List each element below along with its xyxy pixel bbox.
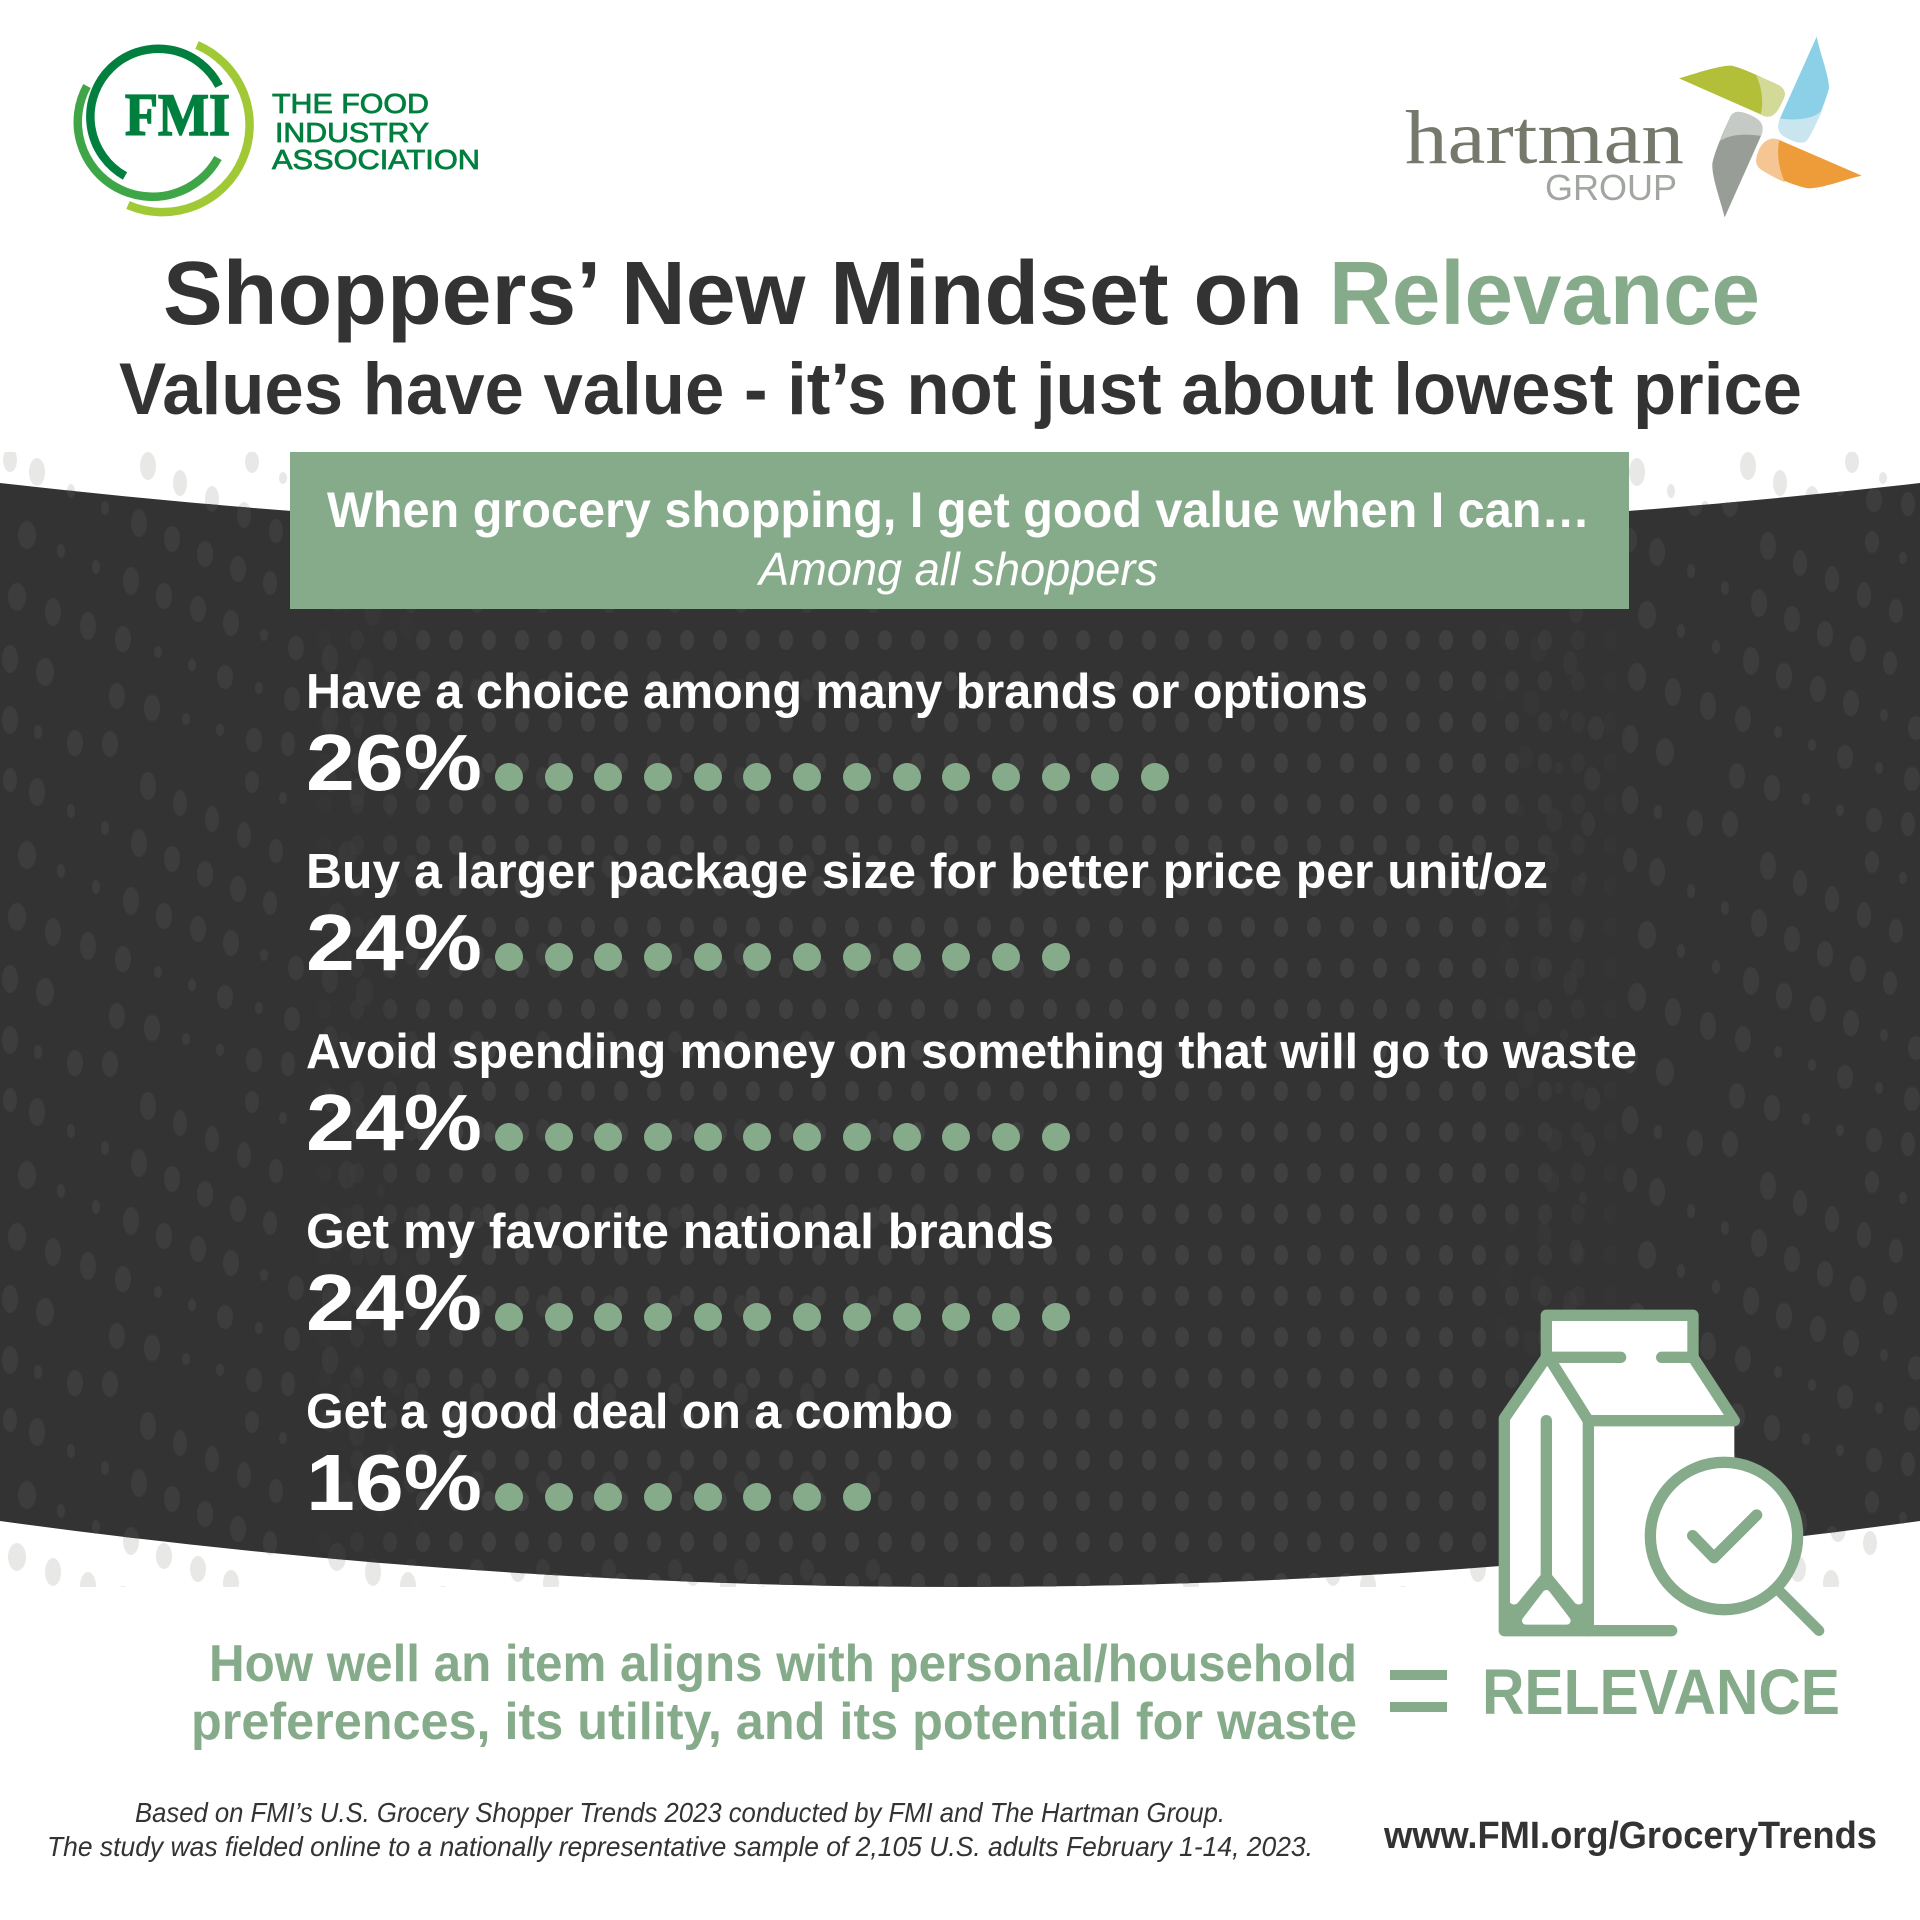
- dark curved panel: [0, 440, 1920, 1660]
- pinwheel icon: [1679, 37, 1862, 217]
- item 1: choice among brands, 26%: [306, 665, 1368, 807]
- relevance definition text: [191, 1635, 1357, 1751]
- footnote: [47, 1797, 1313, 1862]
- item 1: choice among brands, 26%: Have a choice among many brands or options: [306, 665, 1368, 719]
- item 5: good deal on combo, 16%: Get a good deal on a combo: [306, 1385, 953, 1439]
- dot row: 12 dots: [495, 943, 1070, 971]
- FMI tagline: [272, 88, 480, 175]
- title: Relevance: [1329, 244, 1760, 344]
- background dot band on white: [0, 452, 1920, 1587]
- equals sign: [1390, 1670, 1447, 1712]
- item 2: larger package, 24%: 24%: [306, 898, 482, 987]
- FMI wordmark: FMI: [125, 82, 230, 148]
- item 1: choice among brands, 26%: 26%: [306, 718, 482, 807]
- item 3: avoid waste, 24%: 24%: [306, 1078, 482, 1167]
- GROUP wordmark: GROUP: [1545, 167, 1677, 208]
- relevance definition text: How well an item aligns with personal/household: [209, 1635, 1357, 1693]
- icon: milk carton with magnifying glass: [1504, 1315, 1819, 1637]
- footnote: The study was fielded online to a nationally representative sample of 2,105 U.S. adults February 1-14, 2023.: [47, 1831, 1313, 1862]
- item 4: favorite national brands, 24%: Get my favorite national brands: [306, 1205, 1054, 1259]
- dot row: 12 dots: [495, 1123, 1070, 1151]
- item 4: favorite national brands, 24%: [306, 1205, 1070, 1347]
- FMI rings: [78, 45, 250, 212]
- dot row: 8 dots: [495, 1483, 871, 1511]
- banner question: When grocery shopping, I get good value when I can…: [327, 482, 1590, 538]
- item 4: favorite national brands, 24%: 24%: [306, 1258, 482, 1347]
- dot row: 14 dots: [495, 763, 1169, 791]
- item 2: larger package, 24%: [306, 845, 1548, 987]
- item 3: avoid waste, 24%: [306, 1025, 1637, 1167]
- logo: FMI: [78, 45, 480, 212]
- RELEVANCE label: RELEVANCE: [1482, 1656, 1840, 1728]
- item 5: good deal on combo, 16%: 16%: [306, 1438, 482, 1527]
- website URL: www.FMI.org/GroceryTrends: [1383, 1815, 1877, 1857]
- FMI tagline: ASSOCIATION: [272, 144, 480, 175]
- relevance definition text: preferences, its utility, and its potential for waste: [191, 1693, 1357, 1751]
- question banner: [290, 452, 1629, 609]
- FMI tagline: THE FOOD: [272, 88, 429, 119]
- footnote: Based on FMI’s U.S. Grocery Shopper Trends 2023 conducted by FMI and The Hartman Group.: [135, 1797, 1225, 1828]
- hartman wordmark: hartman: [1405, 96, 1684, 180]
- subtitle: Values have value - it’s not just about lowest price: [119, 349, 1802, 430]
- item 2: larger package, 24%: Buy a larger package size for better price per unit/oz: [306, 845, 1548, 899]
- FMI tagline: INDUSTRY: [275, 117, 429, 148]
- logo: Hartman Group: [1405, 37, 1862, 217]
- item 5: good deal on combo, 16%: [306, 1385, 953, 1527]
- item 3: avoid waste, 24%: Avoid spending money on something that will go to waste: [306, 1025, 1637, 1079]
- banner base note: Among all shoppers: [756, 543, 1158, 595]
- dot row: 12 dots: [495, 1303, 1070, 1331]
- title: Shoppers’ New Mindset on: [163, 244, 1303, 344]
